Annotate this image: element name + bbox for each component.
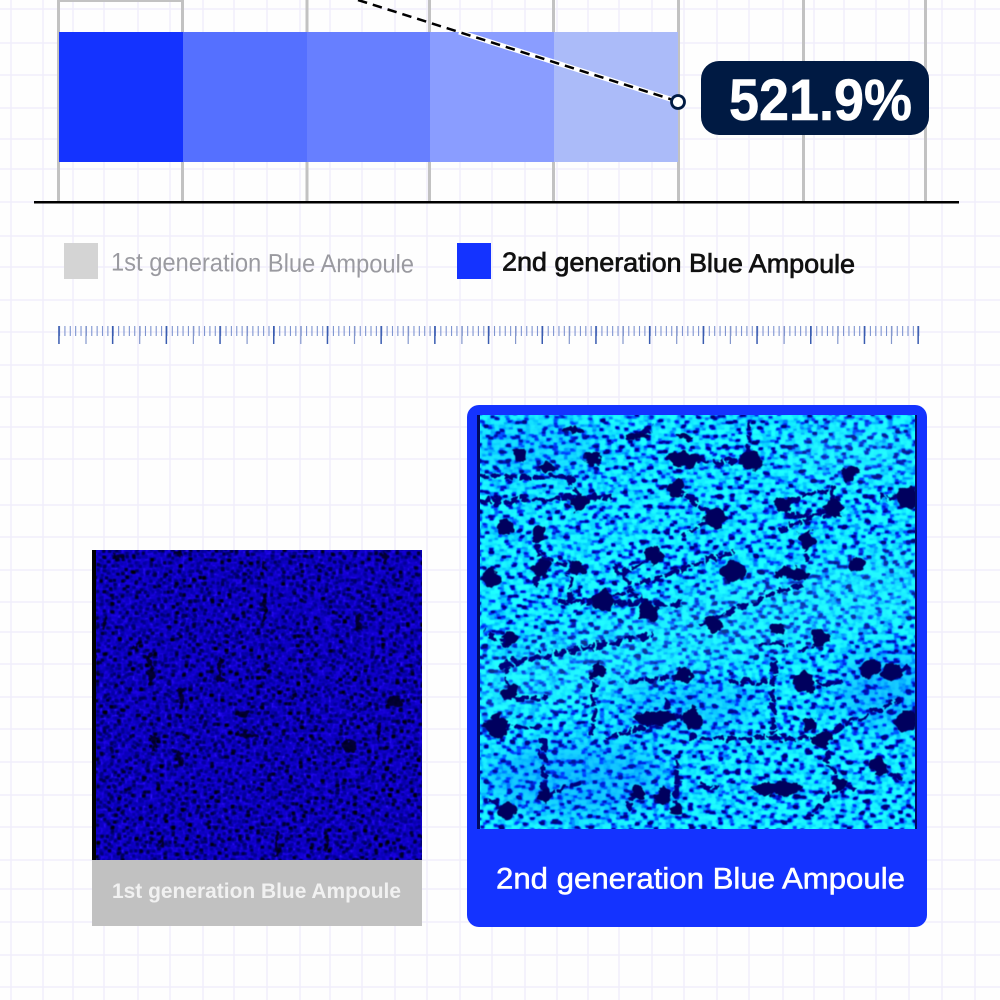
- legend swatch: 1st generation: [64, 243, 98, 279]
- dashed connector with end dot: [358, 0, 684, 108]
- legend: [64, 243, 855, 279]
- micrograph: 2nd generation: [467, 405, 930, 839]
- axis: [34, 201, 959, 204]
- dark cracks and blobs: [477, 418, 919, 819]
- legend label: 1st generation: 1st generation Blue Ampoule: [111, 249, 414, 279]
- micrograph: 1st generation: [92, 550, 422, 860]
- ruler: [58, 331, 920, 335]
- tonal variation: [467, 418, 930, 815]
- legend label: 2nd generation: 2nd generation Blue Ampoule: [502, 247, 855, 279]
- bar chart: [34, 0, 959, 204]
- panel: 1st generation: [82, 540, 432, 926]
- caption: 1st generation: 1st generation Blue Ampoule: [112, 879, 401, 903]
- gray bars: 1st generation outline: [58, 0, 926, 201]
- panel: 2nd generation: [467, 405, 930, 927]
- caption bar: 1st generation: [92, 860, 422, 926]
- callout: 521.9%: 521.9%: [729, 68, 912, 133]
- caption: 2nd generation: 2nd generation Blue Ampoule: [496, 862, 905, 896]
- blue bar segments: [59, 32, 678, 162]
- card background: [467, 405, 927, 927]
- legend swatch: 2nd generation: [457, 243, 491, 279]
